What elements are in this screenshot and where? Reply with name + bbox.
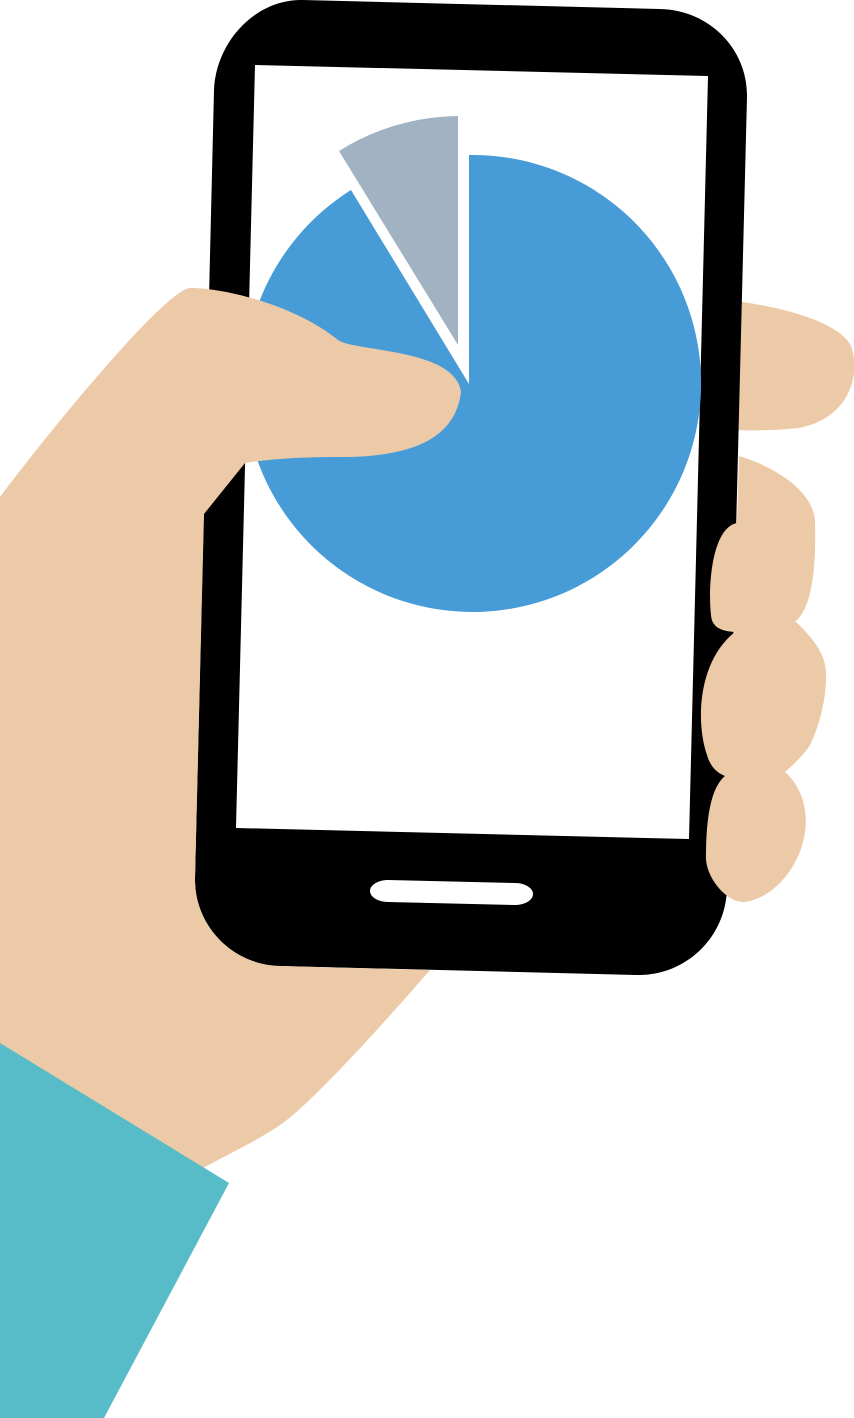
icon: thumb, palm and left side of hand bbox=[0, 288, 461, 1175]
icon: middle finger bbox=[710, 456, 815, 632]
icon: little finger bbox=[706, 770, 806, 902]
icon: home button bbox=[370, 880, 533, 905]
icon: phone screen bbox=[236, 65, 708, 839]
pie chart bbox=[244, 116, 701, 612]
icon: phone body bbox=[195, 0, 747, 975]
icon: ring finger bbox=[701, 622, 826, 778]
icon: shirt sleeve bbox=[0, 1043, 229, 1418]
pie slice: large blue bbox=[244, 155, 701, 612]
icon: index finger behind phone bbox=[735, 301, 854, 430]
pie slice: grey bbox=[339, 116, 458, 345]
